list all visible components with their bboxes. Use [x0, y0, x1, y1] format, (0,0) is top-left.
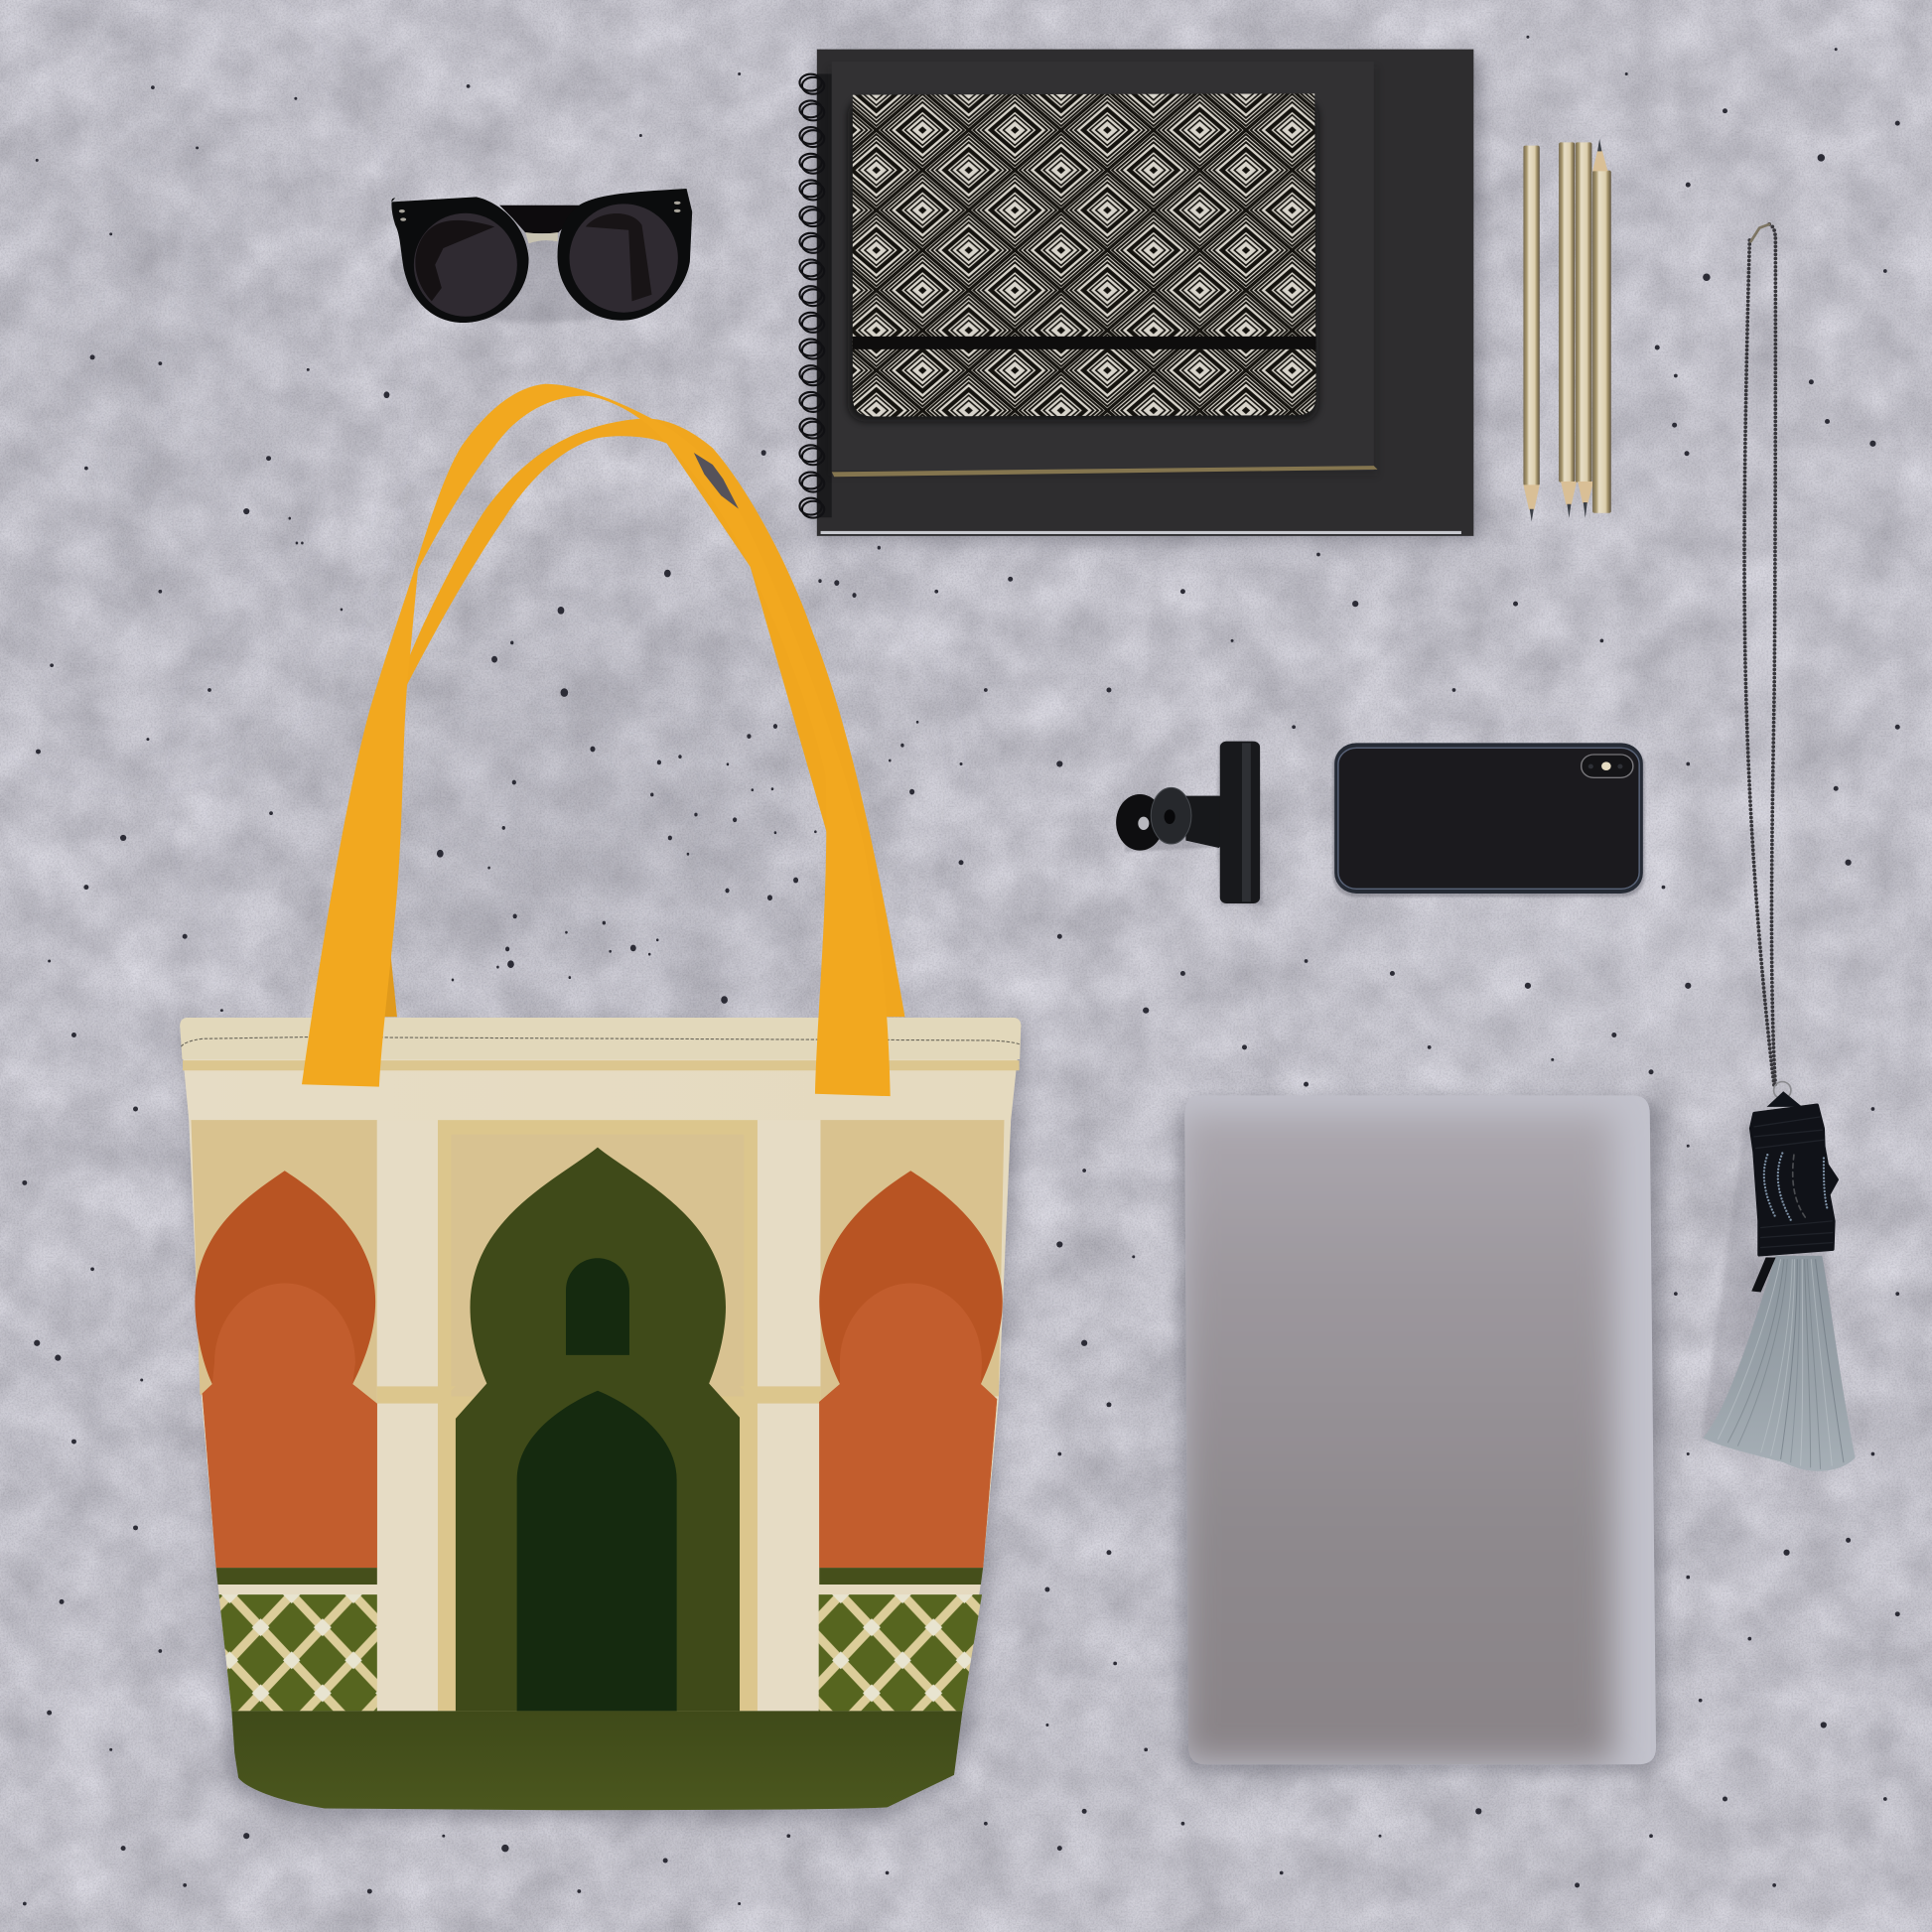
tassel threads	[1703, 1256, 1856, 1471]
metal bridge bar	[525, 232, 558, 243]
tan page edge	[832, 466, 1378, 477]
left lattice	[219, 1594, 377, 1711]
pendant ring	[1774, 1082, 1791, 1099]
notch in handle	[694, 453, 739, 508]
sunglasses	[390, 189, 692, 323]
camera module	[1582, 755, 1633, 777]
phone shadow	[1332, 747, 1645, 897]
clip front disc	[1151, 787, 1191, 844]
clip shadow	[1122, 745, 1263, 905]
concrete tonal patches	[0, 50, 1749, 1109]
clip arm	[1185, 796, 1231, 848]
tan band	[183, 1060, 1020, 1070]
right frame	[558, 189, 692, 321]
phone glass	[1338, 748, 1639, 889]
right lens reflection	[586, 213, 652, 301]
chain clasp	[1751, 224, 1769, 241]
black tab	[1751, 1258, 1776, 1293]
right arch outer	[819, 1171, 1003, 1568]
right green strip	[819, 1568, 983, 1585]
middle book shadow	[828, 67, 1378, 476]
left tan panel	[191, 1120, 377, 1404]
right pillar	[758, 1120, 820, 1386]
tote bag	[180, 384, 1026, 1819]
right tan panel	[820, 1120, 1004, 1404]
back handle left sliver	[378, 956, 397, 1017]
left lens reflection	[415, 220, 494, 301]
right connector	[740, 1386, 820, 1404]
left frame	[391, 197, 529, 323]
notebook stack	[799, 50, 1481, 542]
hinge studs	[399, 202, 681, 221]
phone	[1332, 743, 1645, 897]
tassel shadow	[1702, 1119, 1841, 1449]
center green arch	[456, 1148, 740, 1711]
pencils	[1523, 139, 1611, 521]
base panel	[231, 1711, 962, 1810]
right chain	[1769, 224, 1775, 1087]
left chain	[1744, 240, 1774, 1087]
beaded body	[1751, 1105, 1837, 1255]
laptop lid	[1184, 1095, 1656, 1764]
clip hole	[1138, 817, 1149, 830]
bridge	[499, 206, 579, 233]
right lens	[570, 204, 678, 313]
left pillar	[377, 1120, 438, 1386]
door	[517, 1391, 677, 1711]
pencil 4	[1592, 139, 1611, 513]
clip front hole	[1165, 809, 1175, 824]
patterned notebook	[853, 93, 1315, 416]
right lower pillar	[758, 1404, 819, 1711]
middle notebook	[832, 62, 1374, 471]
top bead cone	[1767, 1091, 1802, 1107]
bag body panels	[180, 1018, 1021, 1810]
camera lenses	[1588, 761, 1623, 770]
elastic band	[853, 337, 1315, 349]
left lens	[414, 213, 517, 317]
left arch inner	[203, 1284, 377, 1568]
stitch line	[181, 1037, 1020, 1046]
necklace chain	[1744, 224, 1775, 1087]
page edge strip	[821, 531, 1461, 534]
canvas body	[180, 1018, 1021, 1711]
front handle	[302, 384, 891, 1096]
pencil 3	[1576, 142, 1593, 518]
center inner panel	[451, 1135, 745, 1396]
right arch inner	[819, 1284, 997, 1568]
laptop shading	[1180, 1113, 1614, 1763]
binding column	[817, 73, 832, 517]
pencil 2	[1559, 142, 1577, 518]
back handle	[407, 418, 904, 1017]
left connector	[377, 1386, 456, 1404]
binder clip	[1116, 742, 1263, 905]
bead highlights	[1754, 1117, 1833, 1248]
notebook shadow	[813, 57, 1481, 542]
right lattice	[819, 1594, 982, 1711]
clip back disc	[1116, 794, 1164, 851]
phone body	[1334, 743, 1643, 894]
laptop shadow	[1180, 1100, 1663, 1772]
center frame	[438, 1120, 758, 1711]
pencil 1	[1523, 146, 1540, 521]
sunglasses shadow	[390, 213, 688, 323]
left arch outer	[195, 1171, 377, 1568]
tassel pendant	[1702, 1082, 1856, 1471]
speckles around the handles	[289, 391, 918, 1004]
laptop	[1180, 1095, 1663, 1772]
upper window	[566, 1258, 629, 1355]
bag shadow	[185, 1029, 1026, 1819]
large spiral notebook	[817, 50, 1473, 536]
clip bar highlight	[1242, 743, 1251, 901]
clip bar	[1220, 742, 1260, 903]
left green strip	[216, 1568, 377, 1585]
top hem	[180, 1018, 1021, 1059]
left lower pillar	[377, 1404, 438, 1711]
spiral binding	[799, 74, 824, 518]
patterned notebook shadow	[848, 98, 1318, 421]
